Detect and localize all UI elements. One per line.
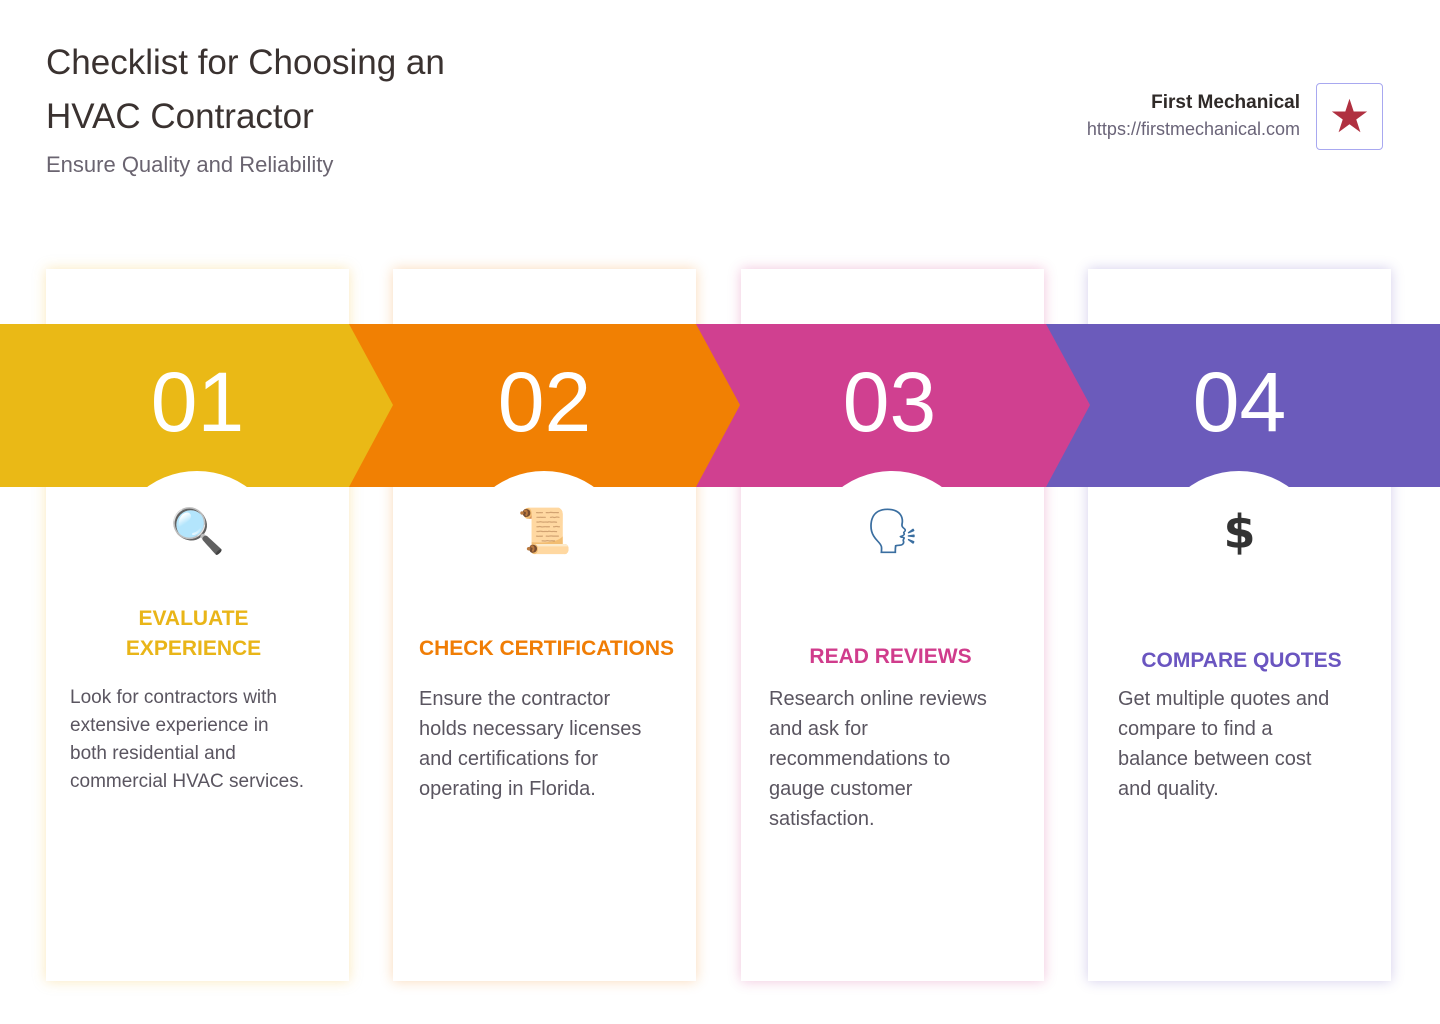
title: Checklist for Choosing an	[46, 43, 445, 82]
icon: dollar: $	[1223, 505, 1256, 559]
title: HVAC Contractor	[46, 97, 314, 136]
card 4	[1088, 269, 1391, 981]
brand: https://firstmechanical.com	[1087, 119, 1300, 139]
card 2	[393, 269, 696, 981]
text 2: Ensure the contractor holds necessary licenses and certifications for operating in Florida.	[419, 688, 641, 800]
text 3: Research online reviews and ask for recommendations to gauge customer satisfaction.	[769, 688, 987, 830]
logo	[1316, 83, 1383, 150]
heading 1: EXPERIENCE	[126, 637, 261, 660]
card 3	[741, 269, 1044, 981]
icon: magnifier: 🔍	[170, 506, 225, 557]
card 1	[46, 269, 349, 981]
number 04: 04	[1193, 355, 1286, 449]
text 1: Look for contractors with extensive experience in both residential and commercial HVAC services.	[70, 687, 304, 792]
number 01: 01	[151, 355, 244, 449]
brand	[1087, 92, 1300, 139]
text 4: Get multiple quotes and compare to find a balance between cost and quality.	[1118, 688, 1329, 800]
heading 4: COMPARE QUOTES	[1141, 649, 1342, 672]
number 03: 03	[843, 355, 936, 449]
heading 1	[126, 607, 261, 660]
title	[46, 43, 445, 136]
logo: ★	[1329, 90, 1370, 142]
brand: First Mechanical	[1151, 92, 1300, 113]
heading 3: READ REVIEWS	[809, 645, 972, 668]
heading 1: EVALUATE	[138, 607, 249, 630]
number 02: 02	[498, 355, 591, 449]
heading 2: CHECK CERTIFICATIONS	[419, 637, 674, 660]
subtitle: Ensure Quality and Reliability	[46, 152, 333, 177]
icon: speaking head: 🗣	[865, 506, 920, 557]
icon: scroll: 📜	[517, 506, 572, 557]
